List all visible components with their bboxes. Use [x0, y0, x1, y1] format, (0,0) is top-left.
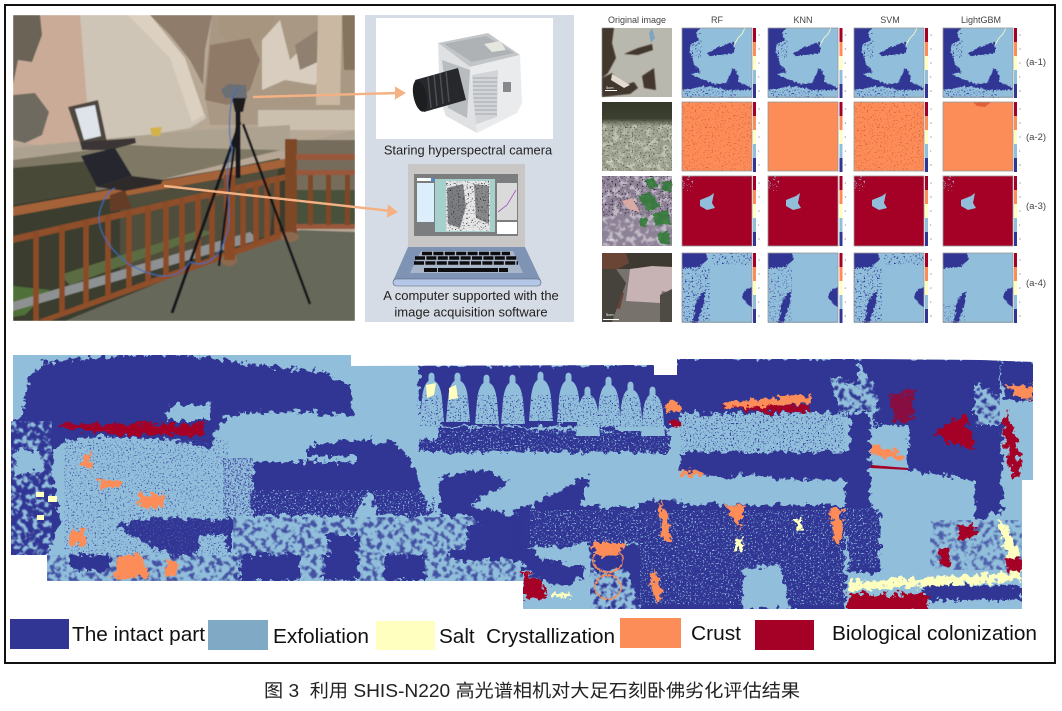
image: a-1 original: [602, 28, 672, 97]
panel: row a-4 classification maps: [679, 250, 1021, 325]
grey drainage strip: [13, 232, 258, 311]
tripod: [172, 105, 310, 313]
legend swatch: intact part: [10, 619, 69, 649]
open laptop: [81, 148, 132, 187]
map: a-4 RF: [679, 250, 760, 325]
image: a-4 original: 5cm: [606, 312, 614, 317]
map: a-1 KNN: [765, 25, 846, 98]
legend swatch: biological colonization: [755, 620, 814, 650]
map: a-4 KNN: [765, 250, 846, 325]
legend: deterioration classes: [10, 618, 1037, 650]
panel: row a-2 classification maps: [682, 102, 1021, 172]
panel: panoramic deterioration map: [0, 350, 1062, 615]
orange rings around the carved heads: [593, 548, 623, 599]
labels: row identifiers: [1026, 57, 1046, 289]
image: a-2 original: 5cm: [606, 159, 614, 164]
legend label: intact part: The intact part: [72, 624, 205, 646]
mottled texture: [11, 378, 1022, 609]
map: a-2 KNN: [768, 102, 846, 172]
image: a-3 original: [602, 176, 672, 246]
headings: classifier columns: RF: [711, 15, 723, 25]
camera on tripod: [221, 84, 247, 98]
map: a-1 RF: [679, 25, 760, 98]
map: a-3 KNN: [768, 176, 846, 246]
arrow: laptop to computer illustration: [165, 186, 397, 217]
labels: row identifiers: (a-3): [1026, 201, 1046, 212]
panel: equipment illustration background: [365, 15, 574, 322]
icon: staring hyperspectral camera: [410, 33, 522, 133]
arrow: tripod camera to camera image: [254, 87, 405, 99]
map: a-2 RF: [682, 102, 760, 172]
map: a-4 SVM: [851, 250, 932, 325]
equipment case: [68, 100, 107, 148]
legend label: biological colonization: Biological colonization: [832, 623, 1037, 645]
icon: laptop with acquisition software: [393, 164, 541, 286]
caption: computer: A computer supported with the: [383, 288, 559, 303]
statues along the upper wall: [420, 372, 665, 436]
map: a-3 RF: [682, 176, 760, 246]
red and orange deterioration patches: [58, 385, 1033, 612]
image: a-4 original: [602, 253, 672, 322]
panel: row a-3 classification maps: [682, 176, 1021, 246]
legend swatch: salt crystallization: [376, 621, 435, 650]
headings: classifier columns: LightGBM: [961, 15, 1001, 25]
map: a-2 SVM: [854, 102, 932, 172]
map: a-1 LightGBM: [940, 25, 1021, 98]
map: a-1 SVM: [851, 25, 932, 98]
legend label: crust: Crust: [691, 623, 741, 645]
caption: camera: Staring hyperspectral camera: [384, 142, 553, 158]
blue cable: [99, 88, 238, 276]
headings: classifier columns: [608, 15, 1001, 25]
headings: classifier columns: Original image: [608, 15, 666, 25]
legend swatch: crust: [620, 618, 681, 648]
legend label: exfoliation: Exfoliation: [273, 626, 369, 648]
image: a-3 original: 5cm: [606, 237, 614, 242]
labels: row identifiers: (a-1): [1026, 57, 1046, 68]
headings: classifier columns: KNN: [793, 15, 813, 25]
caption: computer second line: image acquisition software: [394, 304, 548, 320]
panel: field photograph with tripod, laptop and railing: [13, 15, 355, 321]
legend swatch: exfoliation: [208, 620, 268, 650]
map: a-3 SVM: [854, 176, 932, 246]
labels: row identifiers: (a-2): [1026, 132, 1046, 143]
image: a-1 original: 5cm: [606, 85, 614, 90]
panel: camera image box: [376, 18, 553, 139]
map: a-3 LightGBM: [943, 176, 1021, 246]
map: a-4 LightGBM: [940, 250, 1021, 325]
legend label: salt crystallization: Salt Crystallization: [439, 626, 615, 648]
panel: original images: [602, 28, 672, 322]
headings: classifier columns: SVM: [880, 15, 900, 25]
labels: row identifiers: (a-4): [1026, 278, 1046, 289]
figure caption: 图 3 利用 SHIS-N220 高光谱相机对大足石刻卧佛劣化评估结果: [264, 681, 800, 701]
dark arc over Buddha: [20, 355, 352, 450]
panel: row a-1 classification maps: [679, 25, 1021, 98]
image: a-2 original: [602, 102, 672, 171]
map: a-2 LightGBM: [943, 102, 1021, 172]
